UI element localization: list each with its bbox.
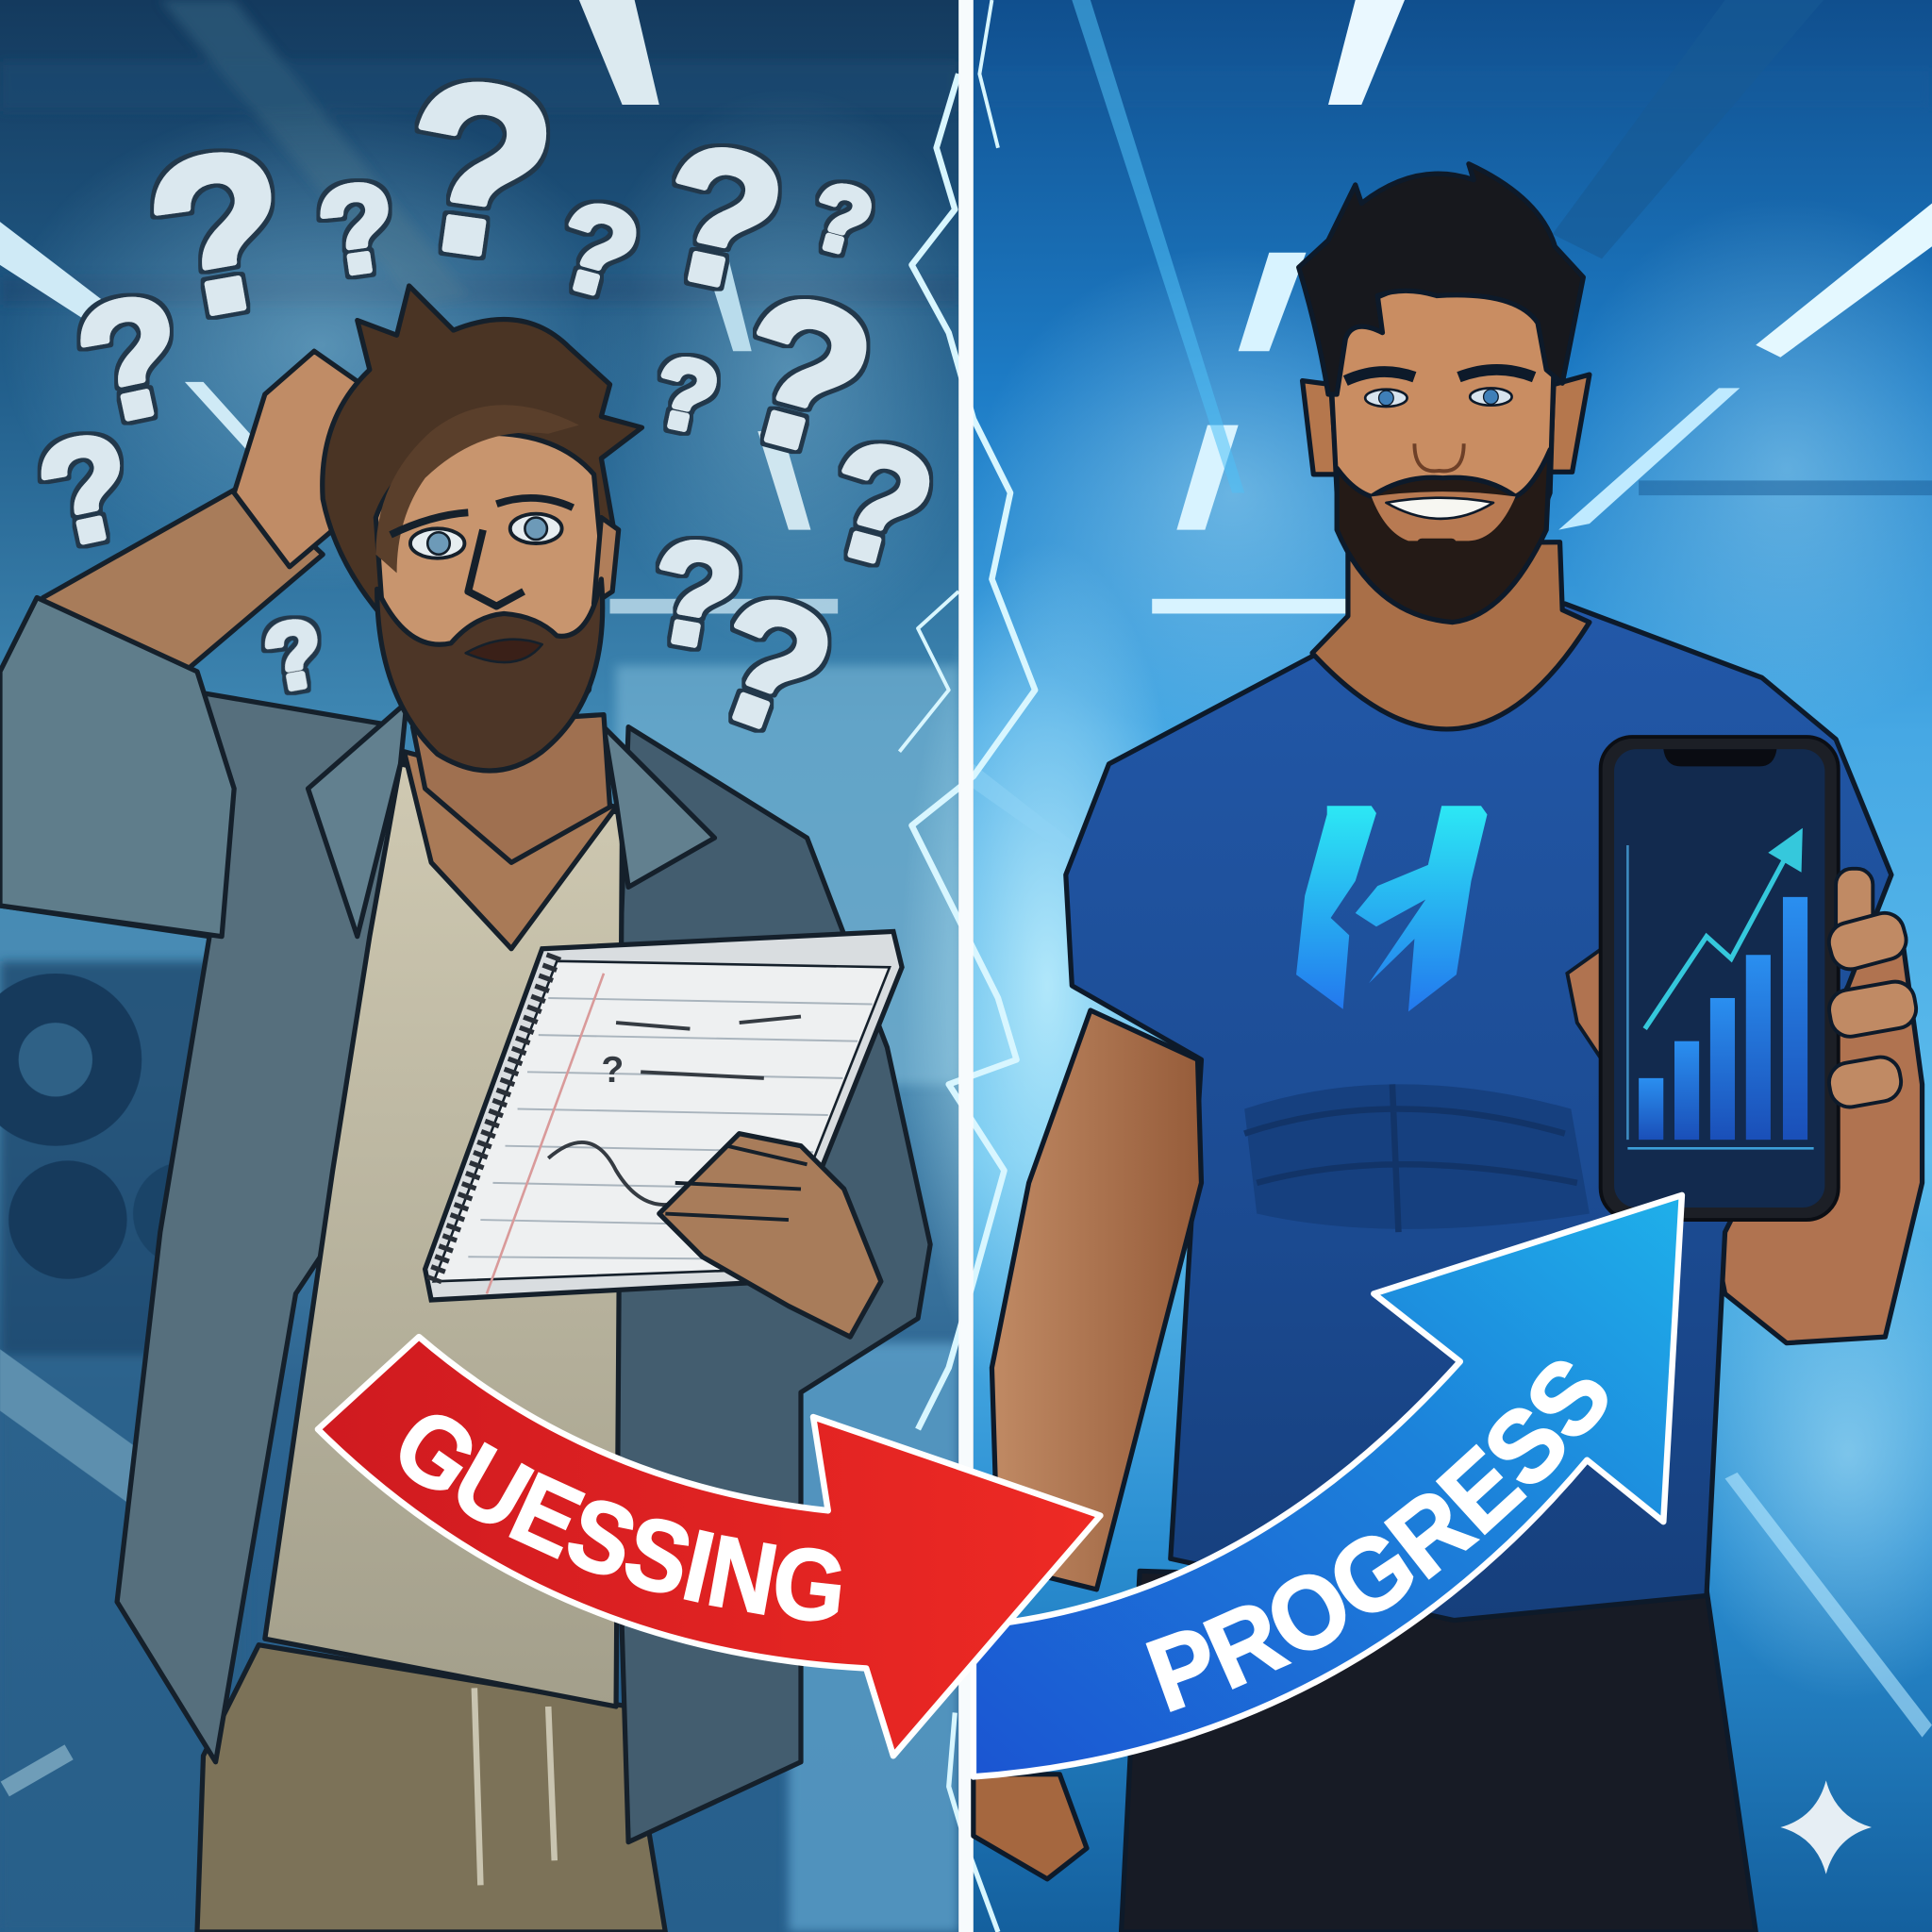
beard: [377, 579, 603, 771]
phone with chart: [1567, 737, 1839, 1220]
smile: [1386, 498, 1493, 519]
hand on head: [234, 351, 394, 567]
pants: [1122, 1571, 1756, 1932]
raised forearm: [0, 483, 323, 752]
brows: [1345, 370, 1534, 381]
question marks: ?: [642, 101, 801, 334]
face: [375, 433, 604, 758]
shirt: [1066, 604, 1891, 1621]
soul patch: [1417, 539, 1457, 551]
question marks: [25, 25, 951, 777]
ear: [594, 518, 619, 604]
question marks: ?: [25, 401, 146, 578]
drawstrings: [475, 1688, 555, 1885]
notebook: ?: [601, 1050, 624, 1091]
question marks: ?: [543, 174, 652, 326]
collar right: [604, 727, 715, 887]
label: progress: PROGRESS: [1145, 1360, 1607, 1712]
left arm: [991, 1010, 1201, 1590]
neck: [413, 715, 610, 862]
question marks: ?: [258, 599, 331, 711]
question marks: ?: [62, 258, 200, 460]
figure: confident man: [974, 164, 1923, 1932]
question marks: ?: [808, 404, 951, 605]
beard: [1337, 450, 1550, 623]
question marks: ?: [387, 25, 570, 312]
right eye: [1470, 388, 1512, 406]
hair back: [323, 286, 641, 616]
left iris: [427, 532, 450, 555]
brows and nose: [391, 498, 573, 607]
question marks: ?: [638, 506, 754, 682]
jacket left: [0, 684, 419, 1762]
icon: sparkle: [1780, 1780, 1872, 1874]
question marks: ?: [801, 161, 883, 276]
fringe: [375, 405, 579, 573]
ears: [1303, 375, 1590, 475]
abs shading: [1244, 1084, 1590, 1229]
mouth: [466, 640, 542, 662]
right eye: [510, 514, 562, 543]
nose: [1414, 443, 1464, 471]
left eye: [1365, 390, 1407, 407]
panel: right gym background: [899, 0, 1932, 1932]
figure: confused man: [0, 286, 930, 1932]
left iris: [1379, 391, 1393, 406]
label: guessing: GUESSING: [400, 1415, 841, 1622]
chest: [404, 752, 616, 949]
hair: [1299, 164, 1583, 394]
question marks: ?: [713, 247, 895, 504]
question marks: ?: [310, 156, 405, 303]
blue arrow: progress: [971, 1192, 1685, 1780]
right iris: [525, 518, 547, 540]
pants: [197, 1645, 665, 1932]
shirt logo: [1296, 806, 1487, 1011]
face: [1331, 283, 1554, 616]
question marks: ?: [687, 554, 857, 777]
lower lip skin: [1372, 491, 1516, 541]
notebook: [425, 931, 902, 1300]
sleeve: [0, 597, 234, 937]
right forearm and palm: [1713, 862, 1923, 1343]
left eye: [410, 528, 464, 558]
question marks: ?: [131, 100, 308, 368]
jacket right: [610, 727, 930, 1842]
right iris: [1484, 390, 1498, 404]
panel: left gym background: [0, 0, 998, 1932]
red arrow: guessing: [315, 1334, 1104, 1758]
fingers on phone: [1824, 869, 1919, 1110]
t-shirt: [265, 764, 623, 1707]
divider: [958, 0, 974, 1932]
collar left: [308, 702, 407, 937]
question marks: ?: [645, 335, 727, 456]
abs lines: [1244, 1084, 1577, 1232]
hand holding notebook: [659, 1134, 881, 1337]
neck: [1312, 542, 1590, 729]
lower hand: [974, 1774, 1087, 1879]
lightning bolts: [899, 0, 1035, 1932]
